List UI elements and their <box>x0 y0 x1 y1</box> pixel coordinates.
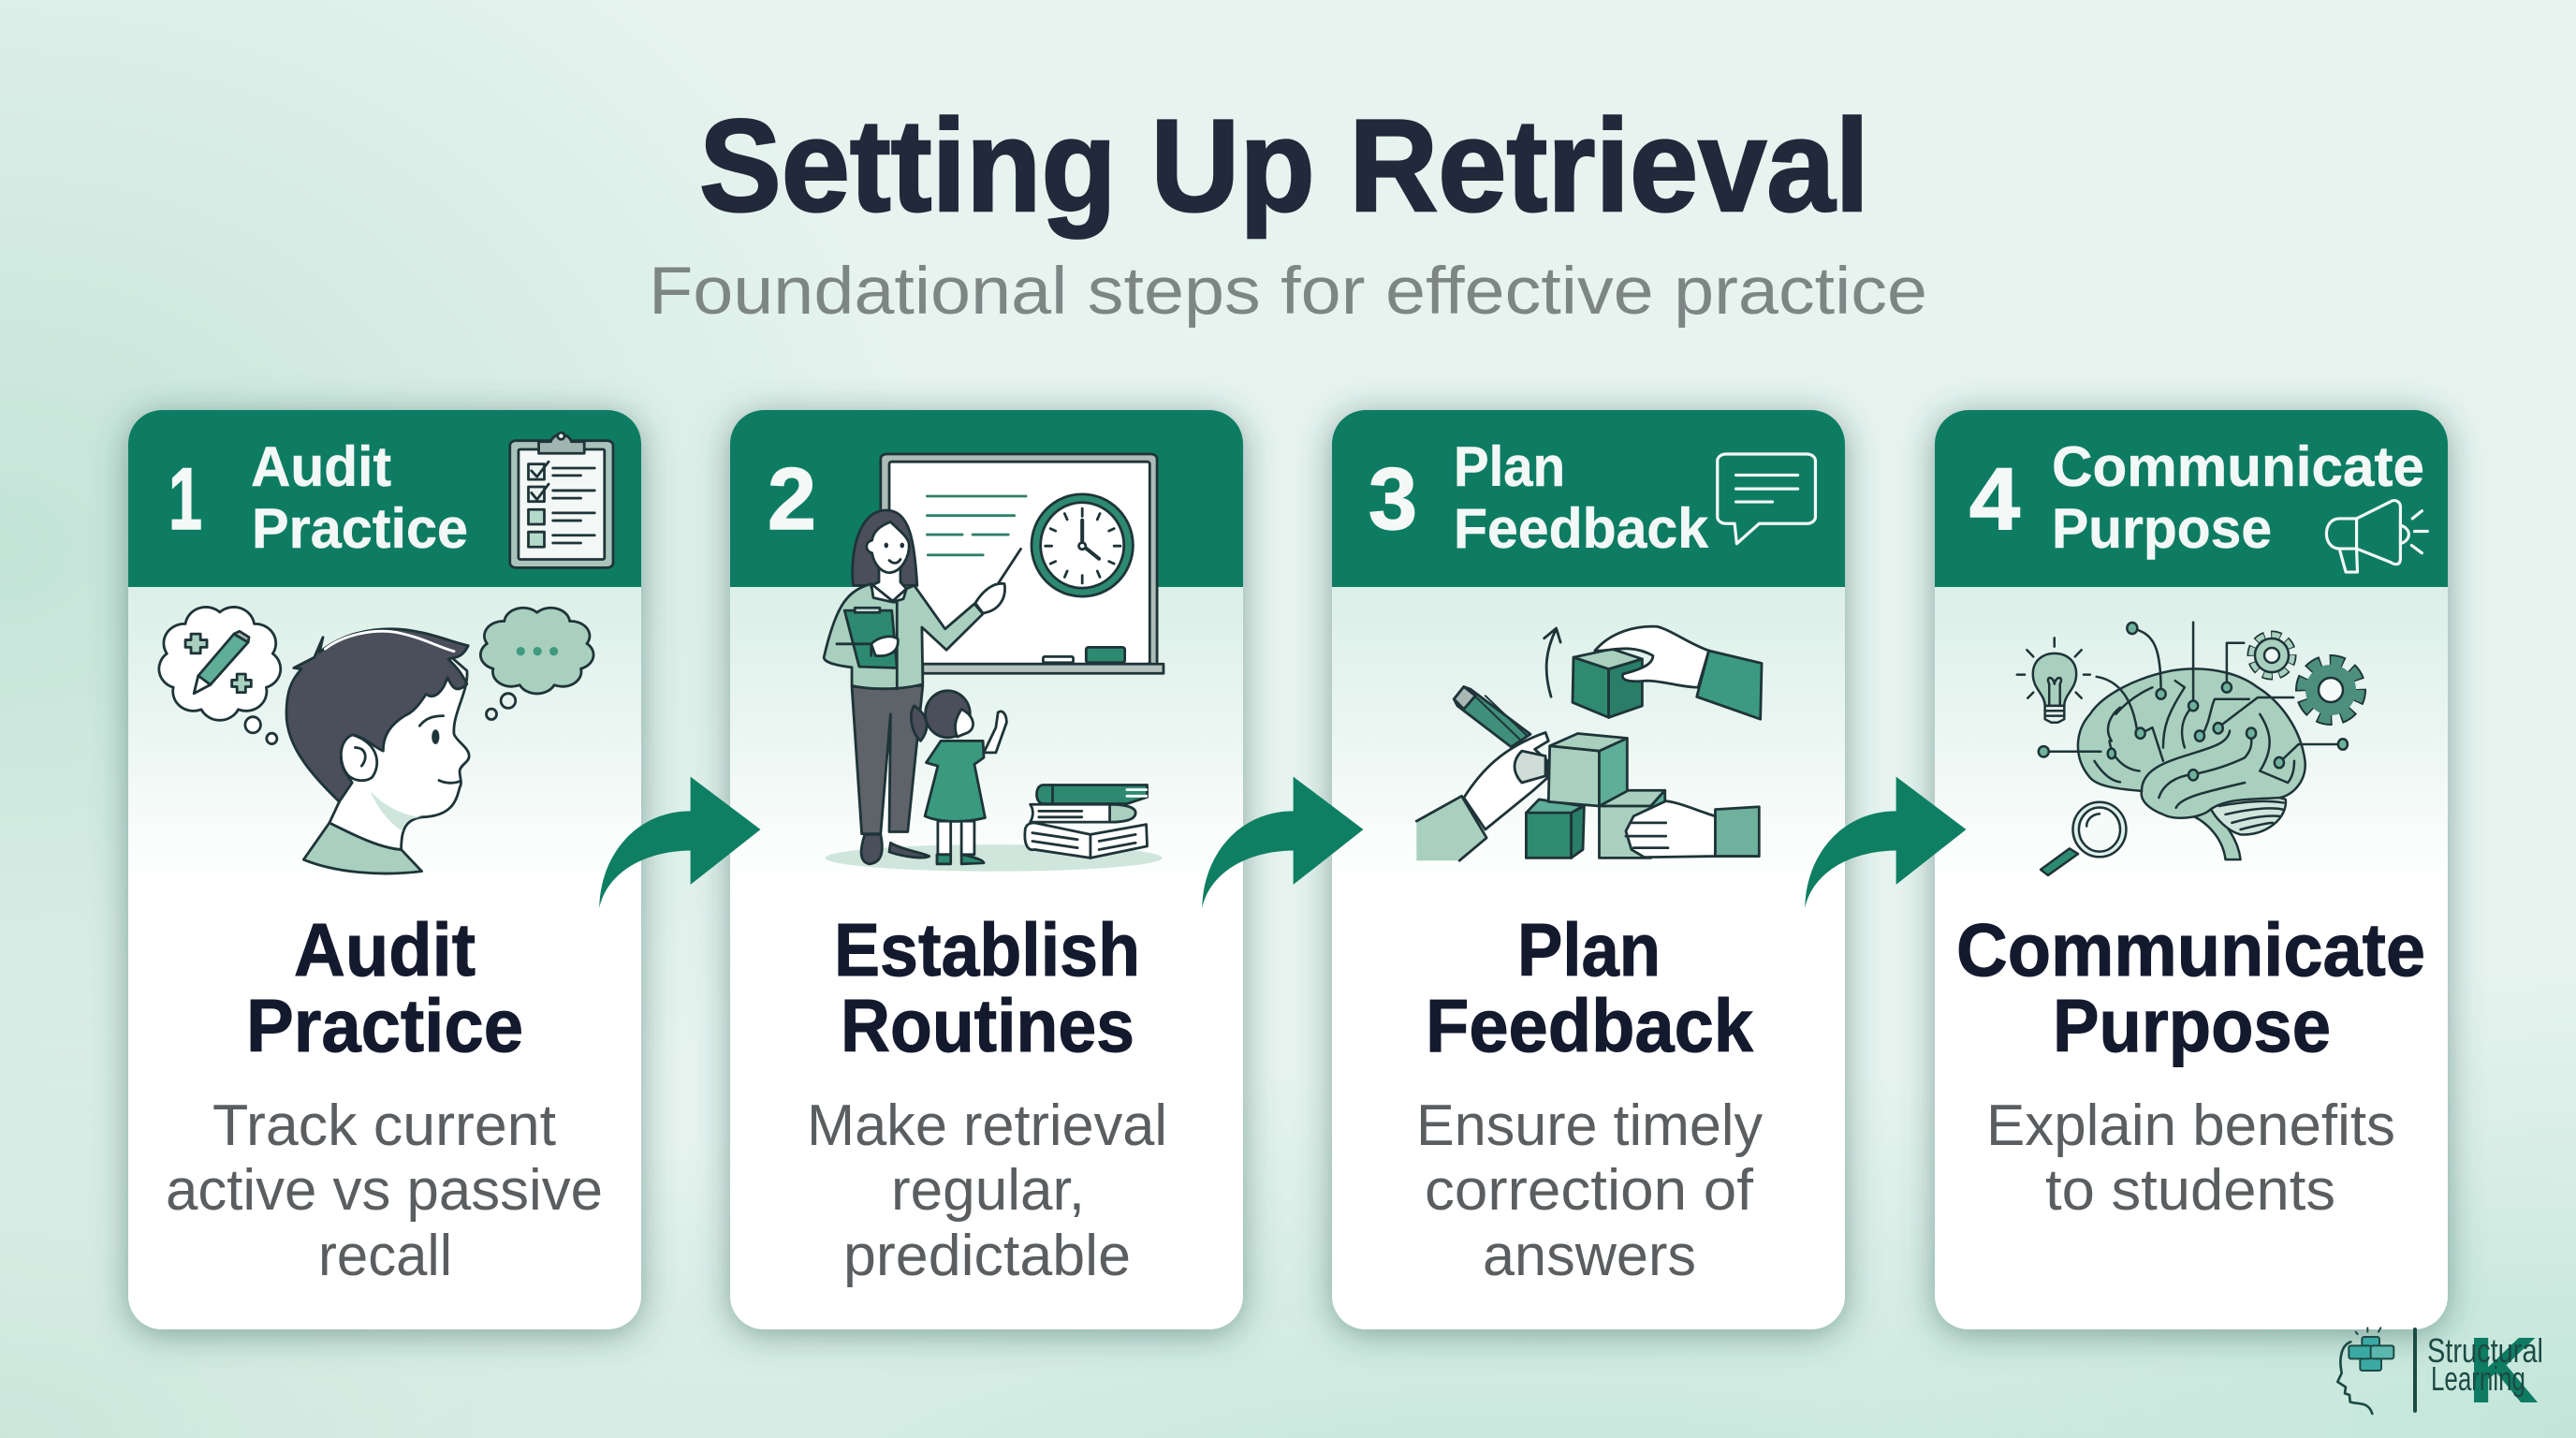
card base <box>1332 410 1845 1329</box>
heading: Plan <box>1517 908 1661 991</box>
step number: 1 <box>168 449 202 548</box>
whiteboard <box>881 454 1164 673</box>
illustration: teacher, whiteboard, student and books <box>824 454 1164 872</box>
divider <box>2413 1328 2417 1413</box>
image area tint <box>128 587 641 887</box>
heading: Routines <box>841 984 1134 1067</box>
shirt <box>303 823 422 873</box>
teacher hand <box>975 583 1004 613</box>
illustration: student thinking <box>159 607 593 873</box>
brain folds <box>2094 681 2294 808</box>
image area tint <box>1332 587 1845 887</box>
cerebellum <box>2210 796 2286 834</box>
description: predictable <box>843 1224 1131 1288</box>
logo wordmark <box>2427 1331 2543 1398</box>
panel: step 2 Establish Routines <box>730 410 1243 1329</box>
thought cloud with pencil <box>159 607 281 744</box>
arrow: step 3 to step 4 <box>1805 777 1966 908</box>
description: to students <box>2045 1158 2335 1223</box>
right sleeve <box>1715 807 1759 857</box>
circuit nodes <box>2039 623 2348 781</box>
light bulb <box>2017 638 2090 723</box>
collar <box>871 584 906 602</box>
teacher trousers <box>852 685 923 834</box>
description: Ensure timely <box>1416 1093 1763 1158</box>
description: active vs passive <box>166 1158 603 1223</box>
holding hand <box>871 637 898 656</box>
ear <box>341 735 377 781</box>
header label: Audit <box>251 435 391 498</box>
description: regular, <box>891 1158 1085 1223</box>
illustration: hands building blocks <box>1416 626 1762 860</box>
header label: Practice <box>252 497 468 560</box>
icon: head with puzzle blocks <box>2337 1328 2393 1414</box>
description <box>166 1093 603 1288</box>
icon: clipboard checklist <box>510 433 613 567</box>
panel: step 3 Plan Feedback <box>1332 410 1845 1329</box>
subtitle: Foundational steps for effective practice <box>649 255 1927 329</box>
heading <box>834 908 1140 1067</box>
arrow: step 2 to step 3 <box>1202 777 1363 908</box>
description <box>807 1093 1167 1288</box>
illustration: brain with circuits <box>2017 623 2348 875</box>
upper sleeve <box>1697 651 1762 719</box>
heading <box>1956 908 2425 1067</box>
teacher jacket <box>824 584 983 689</box>
icon: speech bubble <box>1718 454 1815 544</box>
left sleeve edge <box>1416 796 1486 860</box>
heading: Audit <box>294 908 476 991</box>
magnifying glass <box>2041 802 2126 875</box>
right hand <box>1626 801 1715 858</box>
header band <box>1332 410 1845 587</box>
heading: Purpose <box>2053 984 2331 1067</box>
heading: Communicate <box>1956 908 2425 991</box>
heading: Feedback <box>1426 984 1753 1067</box>
header label <box>2052 435 2424 560</box>
left sleeve fill <box>1416 796 1486 860</box>
card base <box>1935 410 2448 1329</box>
hair <box>286 629 468 801</box>
step number: 3 <box>1368 449 1417 548</box>
pointer <box>998 549 1021 584</box>
student <box>911 691 1006 864</box>
description: Make retrieval <box>807 1093 1167 1158</box>
header band <box>1935 410 2448 587</box>
description: correction of <box>1425 1158 1754 1223</box>
description <box>1986 1093 2395 1223</box>
card base <box>730 410 1243 1329</box>
bottom right block <box>1599 790 1665 858</box>
description <box>1416 1093 1763 1288</box>
pencil <box>1454 687 1530 747</box>
header label: Purpose <box>2052 497 2272 560</box>
teacher face <box>867 521 909 573</box>
left hand knuckle shading <box>1515 751 1545 783</box>
panel: step 1 Audit Practice <box>128 410 641 1329</box>
card base <box>128 410 641 1329</box>
icon: large gear <box>2302 661 2360 719</box>
step number: 4 <box>1969 449 2020 548</box>
clock <box>1032 494 1133 596</box>
description: Track current <box>212 1093 556 1158</box>
lifted block <box>1573 649 1642 717</box>
cerebrum <box>2078 668 2305 818</box>
teacher hair <box>853 510 917 585</box>
face and neck <box>329 654 469 849</box>
header band <box>730 410 1243 587</box>
floor shadow <box>826 844 1163 872</box>
header label <box>251 435 468 560</box>
heading <box>246 908 523 1067</box>
left hand <box>1464 732 1548 829</box>
brain stem <box>2193 810 2241 859</box>
upper hand <box>1595 626 1709 687</box>
image area tint <box>730 587 1243 887</box>
logo wordmark: Learning <box>2431 1359 2525 1398</box>
books <box>1025 785 1148 858</box>
teacher neck <box>869 565 906 601</box>
clipboard <box>844 610 897 668</box>
icon: megaphone <box>2326 501 2427 572</box>
center block <box>1548 734 1627 806</box>
header label: Plan <box>1454 435 1565 498</box>
heading: Practice <box>246 984 523 1067</box>
title: Setting Up Retrieval <box>699 92 1869 239</box>
logo wordmark: Structural <box>2427 1331 2543 1370</box>
header label: Feedback <box>1454 497 1709 560</box>
description: Explain benefits <box>1986 1093 2395 1158</box>
upward arrow <box>1544 628 1560 697</box>
icon: small gear <box>2251 635 2292 676</box>
watermark K: K <box>2467 1318 2539 1423</box>
description: answers <box>1483 1224 1696 1288</box>
panel: step 4 Communicate Purpose <box>1935 410 2448 1329</box>
teacher shoes <box>861 834 882 864</box>
logo: Structural Learning <box>2337 1318 2543 1423</box>
bottom left block <box>1526 800 1584 858</box>
header label: Communicate <box>2052 435 2424 498</box>
thought cloud with dots <box>480 608 593 720</box>
facial features <box>432 729 439 744</box>
circuit lines <box>2043 623 2343 763</box>
step number: 2 <box>768 449 816 548</box>
header label <box>1454 435 1709 560</box>
arrow: step 1 to step 2 <box>599 777 760 908</box>
heading <box>1426 908 1753 1067</box>
heading: Establish <box>834 908 1140 991</box>
image area tint <box>1935 587 2448 887</box>
header band <box>128 410 641 587</box>
description: recall <box>318 1224 452 1288</box>
